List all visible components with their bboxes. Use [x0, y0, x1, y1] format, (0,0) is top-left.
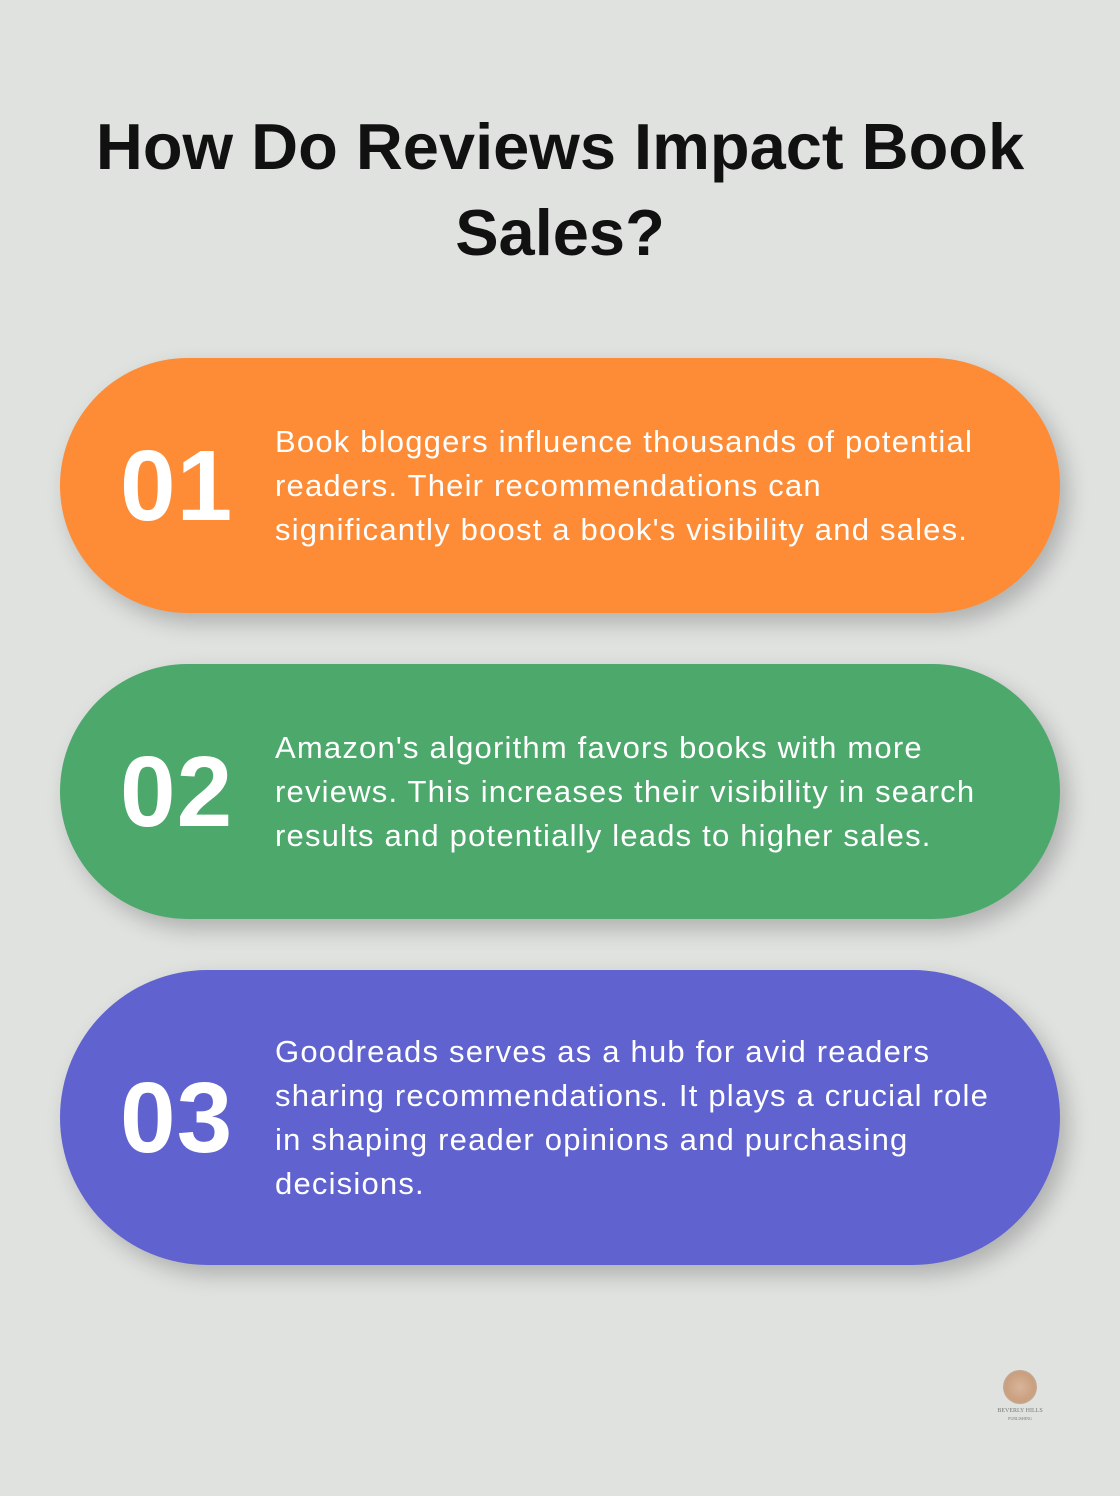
title	[96, 110, 1024, 269]
number 01: 01	[120, 430, 233, 542]
text 03: Goodreads serves as a hub for avid readers	[275, 1034, 930, 1068]
text 01: Book bloggers influence thousands of potential	[275, 424, 973, 458]
number 02: 02	[120, 736, 233, 848]
panel: card 01	[60, 358, 1060, 613]
title: Sales?	[455, 196, 665, 269]
text 03	[275, 1034, 989, 1200]
text 03: sharing recommendations. It plays a crucial role	[275, 1078, 989, 1112]
logo text	[997, 1408, 1043, 1421]
text 02: reviews. This increases their visibility in search	[275, 774, 975, 808]
panel: card 02	[60, 664, 1060, 919]
panel: card 03	[60, 970, 1060, 1265]
text 01	[275, 424, 973, 546]
logo text: PUBLISHING	[1008, 1416, 1032, 1421]
number 03: 03	[120, 1062, 233, 1174]
text 01: significantly boost a book's visibility and sales.	[275, 512, 968, 546]
title: How Do Reviews Impact Book	[96, 110, 1024, 183]
text 01: readers. Their recommendations can	[275, 468, 822, 502]
logo	[997, 1370, 1043, 1421]
text 03: decisions.	[275, 1166, 425, 1200]
text 02: results and potentially leads to higher sales.	[275, 818, 932, 852]
icon: logo circle	[1003, 1370, 1037, 1404]
text 02	[275, 730, 975, 852]
logo text: BEVERLY HILLS	[997, 1408, 1043, 1414]
text 03: in shaping reader opinions and purchasing	[275, 1122, 908, 1156]
text 02: Amazon's algorithm favors books with more	[275, 730, 923, 764]
